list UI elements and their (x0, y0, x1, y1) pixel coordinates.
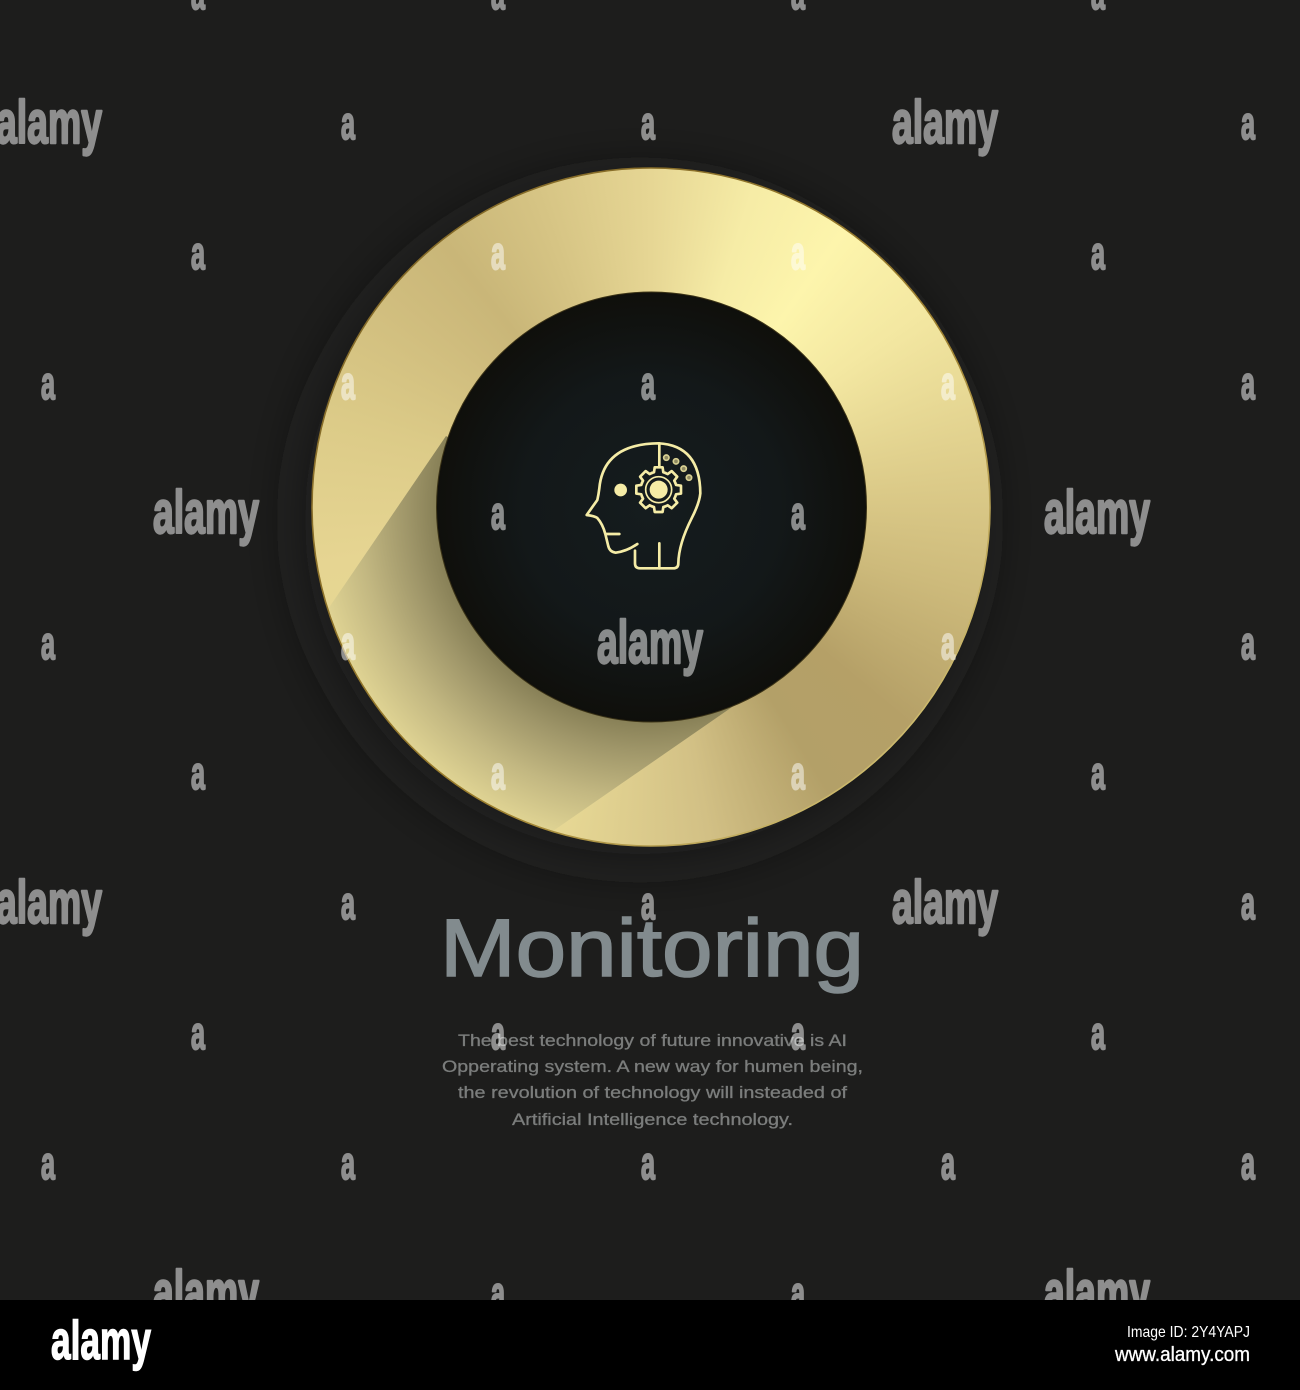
watermark pattern: a (791, 1007, 805, 1059)
watermark pattern: a (941, 1137, 955, 1189)
centre lines (655, 443, 663, 568)
watermark pattern: a (41, 617, 55, 669)
watermark pattern: a (1241, 877, 1255, 929)
footer logo: alamy (51, 1309, 151, 1371)
watermark pattern: a (1241, 97, 1255, 149)
watermark pattern: a (791, 487, 805, 539)
description text: Artificial Intelligence technology. (512, 1111, 793, 1129)
ring rim (312, 168, 990, 846)
gold ring badge (300, 168, 990, 860)
description text: Opperating system. A new way for humen being, (442, 1058, 863, 1076)
description text: The best technology of future innovative is AI (458, 1032, 847, 1050)
watermark pattern: a (1091, 747, 1105, 799)
watermark pattern: a (341, 617, 355, 669)
watermark pattern: alamy (153, 1259, 259, 1326)
watermark pattern: a (191, 747, 205, 799)
watermark pattern: a (1241, 357, 1255, 409)
watermark pattern: a (191, 227, 205, 279)
head outline (587, 443, 700, 568)
description text: the revolution of technology will insteaded of (458, 1084, 847, 1102)
gear (636, 467, 681, 512)
watermark pattern: a (491, 1007, 505, 1059)
watermark pattern: a (491, 1267, 505, 1319)
gold ring disc (312, 168, 990, 846)
watermark pattern: a (941, 617, 955, 669)
watermark pattern: alamy (1044, 479, 1150, 546)
long shadow on ring (329, 436, 732, 830)
watermark pattern: a (491, 487, 505, 539)
watermark pattern: a (341, 877, 355, 929)
watermark pattern: a (1091, 227, 1105, 279)
watermark pattern: a (641, 877, 655, 929)
watermark pattern: alamy (153, 479, 259, 546)
watermark pattern: a (41, 357, 55, 409)
watermark pattern: a (641, 97, 655, 149)
image id: Image ID: 2Y4YAPJ (1127, 1324, 1250, 1341)
inner dark circle (436, 292, 866, 722)
watermark pattern: a (791, 227, 805, 279)
watermark pattern: a (641, 357, 655, 409)
website: www.alamy.com (1114, 1344, 1250, 1366)
watermark pattern: a (1091, 1007, 1105, 1059)
watermark pattern: a (941, 357, 955, 409)
watermark pattern: alamy (597, 609, 703, 676)
watermark pattern: alamy (892, 89, 998, 156)
title: Monitoring (440, 903, 864, 994)
description text (442, 1032, 863, 1129)
watermark pattern: a (791, 747, 805, 799)
watermark pattern: a (191, 1007, 205, 1059)
watermark pattern: alamy (0, 869, 102, 936)
watermark pattern: a (1241, 1137, 1255, 1189)
circuit dots (664, 455, 692, 480)
watermark pattern: alamy (0, 89, 102, 156)
mouth line (607, 530, 619, 538)
watermark pattern: a (341, 357, 355, 409)
watermark pattern: a (341, 97, 355, 149)
watermark pattern: a (791, 1267, 805, 1319)
watermark pattern: a (641, 1137, 655, 1189)
watermark pattern: a (1241, 617, 1255, 669)
eye dot (614, 484, 627, 496)
watermark pattern: a (41, 1137, 55, 1189)
watermark pattern: alamy (1044, 1259, 1150, 1326)
icon: head with gear (587, 443, 700, 568)
watermark pattern: a (491, 747, 505, 799)
watermark pattern: alamy (892, 869, 998, 936)
watermark pattern: a (341, 1137, 355, 1189)
footer bar (0, 1300, 1300, 1390)
watermark pattern: a (491, 227, 505, 279)
